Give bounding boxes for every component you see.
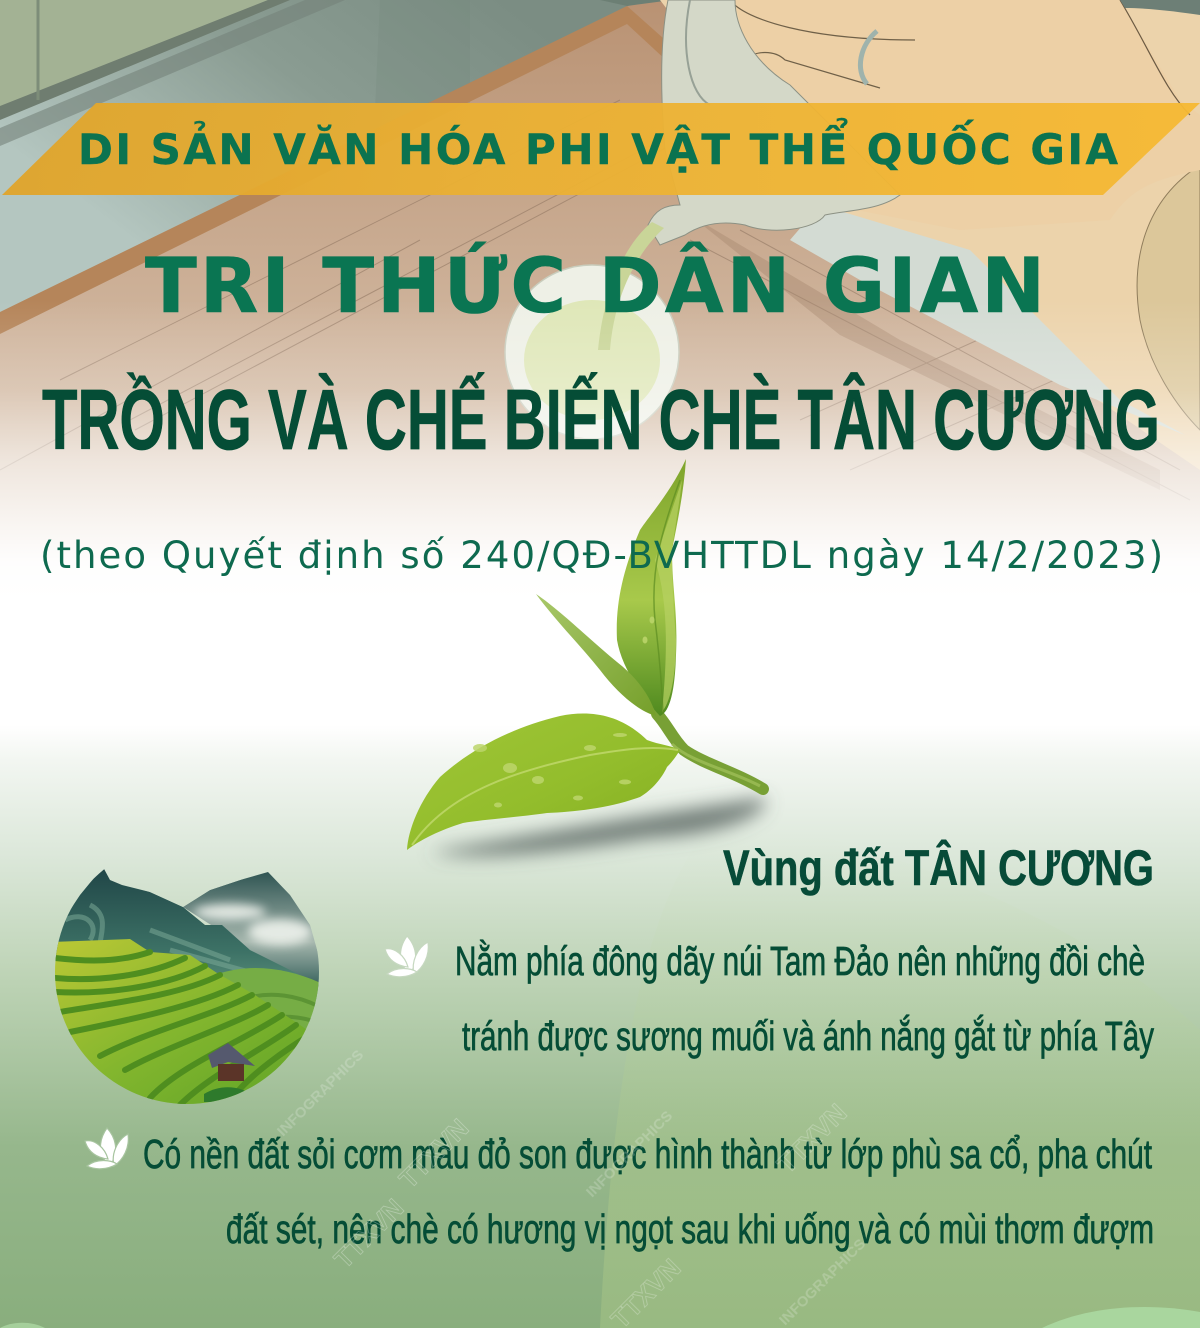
ring: [860, 31, 877, 84]
watermarks: INFOGRAPHICS: [274, 1046, 367, 1140]
tea bud illustration: [407, 459, 763, 850]
cup: [505, 265, 679, 439]
watermarks: TTXVN: [393, 1113, 475, 1194]
watermarks: [274, 1046, 869, 1328]
icon: terraced tea hills in a circle: [50, 865, 325, 1110]
grey counter: [0, 0, 640, 318]
watermarks: TTXVN: [328, 1193, 410, 1274]
title line 1: TRI THỨC DÂN GIAN: [145, 241, 1045, 330]
teapot: [648, 0, 900, 245]
narrow bud leaf: [536, 594, 656, 716]
pale leaf shape: [0, 810, 1200, 1328]
stem: [657, 714, 763, 789]
banner text: DI SẢN VĂN HÓA PHI VẬT THỂ QUỐC GIA: [78, 117, 1118, 174]
text: location paragraph: [455, 938, 1154, 1059]
water drops: [473, 616, 654, 808]
top banner ribbon: [2, 103, 1200, 195]
icon: white leaf bullet 1: [385, 936, 428, 977]
tiled wall: [0, 0, 268, 112]
right background: [660, 0, 1200, 470]
background illustration: pouring green tea: [0, 0, 1200, 600]
terraces: [55, 939, 306, 1104]
watermarks: INFOGRAPHICS: [583, 1107, 676, 1201]
upper tall leaf: [617, 459, 686, 716]
fade overlay: [0, 300, 1200, 600]
watermarks: INFOGRAPHICS: [776, 1235, 869, 1328]
tea stream: [598, 222, 664, 350]
hut: [208, 1043, 255, 1068]
hand: [1188, 164, 1200, 172]
sleeve: [1137, 165, 1200, 430]
icon: white leaf bullet 2: [85, 1128, 128, 1169]
back mountain with cloud: [183, 870, 325, 990]
tray grooves: [0, 100, 1190, 500]
front mountain: [50, 865, 320, 1010]
watermarks: TTXVN: [771, 1098, 853, 1179]
green lower background: [0, 725, 1200, 1328]
subtitle: legal decision: (theo Quyết định số 240/QĐ-BVHTTDL ngày 14/2/2023): [40, 534, 1163, 577]
tray surface: [0, 0, 1200, 600]
light hill on the right: [222, 968, 319, 1050]
leaf shadow: [430, 798, 765, 856]
text: soil paragraph: [143, 1131, 1154, 1252]
wooden tray edge: [0, 6, 690, 334]
lower large leaf: [407, 714, 680, 850]
white cloth: [790, 205, 1185, 435]
